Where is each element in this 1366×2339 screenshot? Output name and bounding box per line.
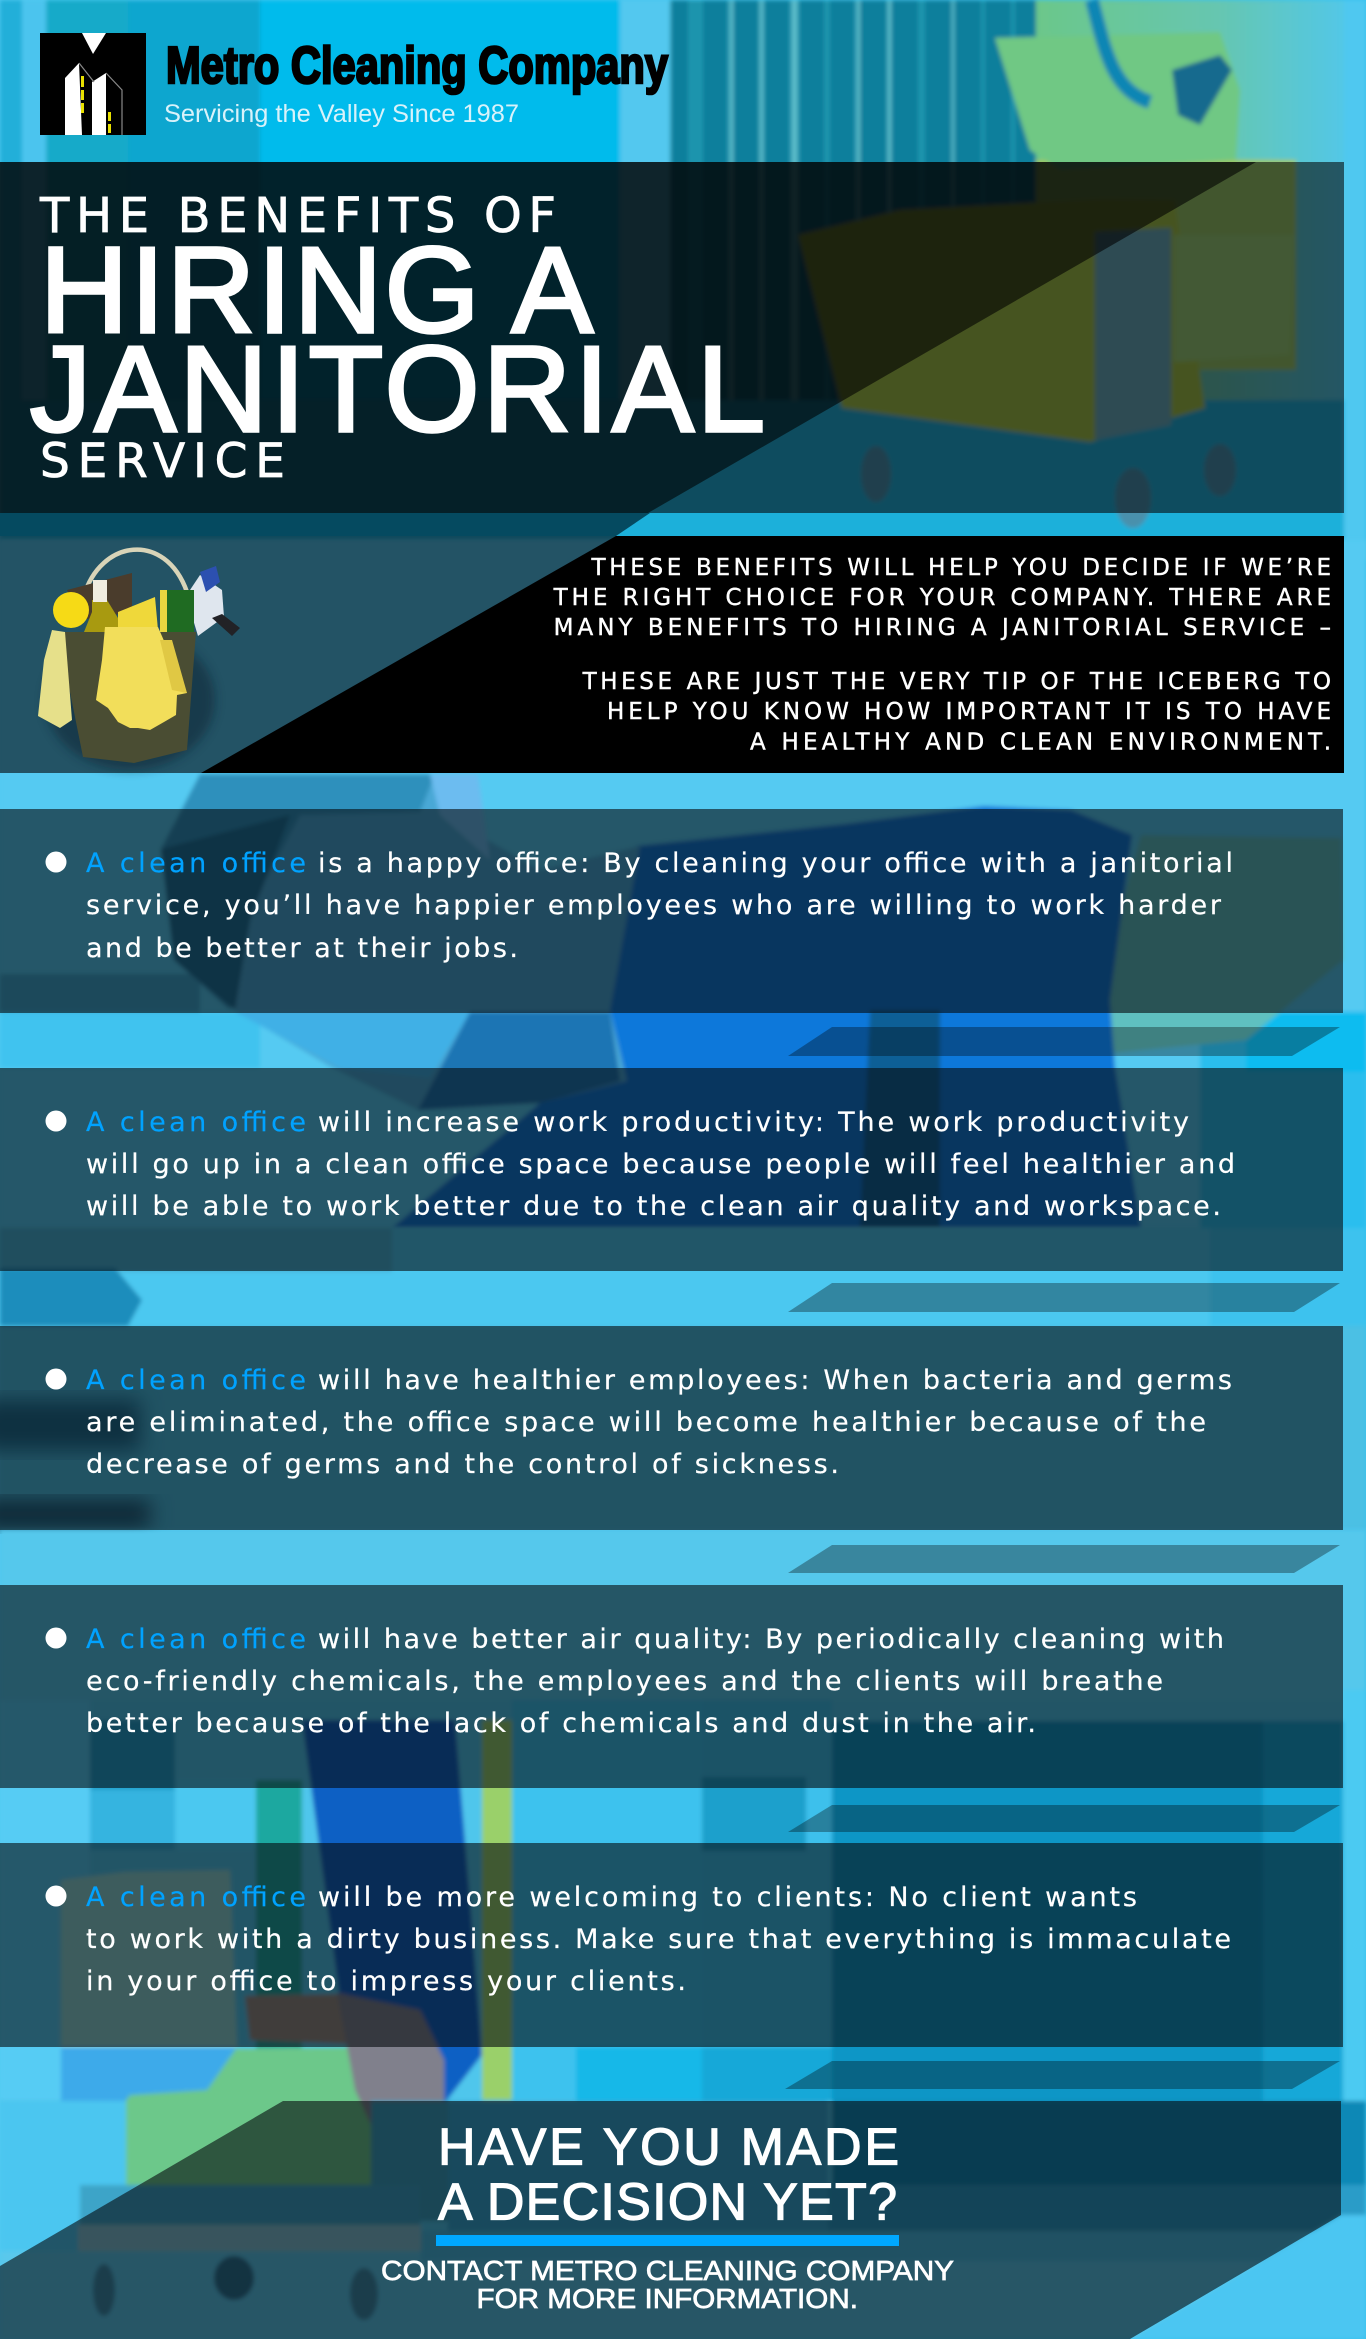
accent bar 1 (788, 1027, 1340, 1056)
icon: cleaning supplies bucket (38, 550, 240, 770)
benefit text: service, you’ll have happier employees who are willing to work harder (86, 890, 1222, 921)
contact text: CONTACT METRO CLEANING COMPANY (381, 2255, 954, 2286)
intro text (553, 555, 1331, 756)
intro text: THE RIGHT CHOICE FOR YOUR COMPANY. THERE ARE (553, 585, 1331, 611)
cart: grey rag, blue rag, bucket, towel, mop (61, 1870, 237, 2047)
panel: benefit 4 (0, 1585, 1343, 1788)
benefit text: and be better at their jobs. (86, 933, 518, 964)
intro text: MANY BENEFITS TO HIRING A JANITORIAL SERVICE – (554, 615, 1331, 641)
benefit text: A clean office (86, 848, 306, 879)
company name: Metro Cleaning Company (166, 37, 668, 95)
benefit text (86, 1882, 1231, 1997)
photo: desk and keyboard (0, 1228, 1366, 1588)
benefit text: A clean office (86, 1624, 306, 1655)
panel: title banner (0, 162, 1344, 513)
benefit text: will have better air quality: By periodically cleaning with (318, 1624, 1224, 1655)
photo: cleaning cart and mop (0, 1530, 1366, 2339)
intro text: HELP YOU KNOW HOW IMPORTANT IT IS TO HAVE (607, 699, 1331, 725)
benefit text (86, 1624, 1224, 1739)
title: JANITORIAL (30, 321, 765, 457)
call to action heading: A DECISION YET? (438, 2174, 897, 2232)
benefit text: will go up in a clean office space because people will feel healthier and (86, 1149, 1235, 1180)
panel: benefit 1 (0, 809, 1343, 1013)
intro text: THESE BENEFITS WILL HELP YOU DECIDE IF WE’RE (590, 555, 1331, 581)
photo: mop bucket scene (0, 0, 1366, 560)
title: HIRING A (40, 222, 594, 358)
title (30, 188, 765, 489)
company tagline: Servicing the Valley Since 1987 (164, 100, 519, 128)
contact text (381, 2255, 954, 2314)
benefit text: in your office to impress your clients. (86, 1966, 686, 1997)
panel: benefit 2 (0, 1068, 1343, 1271)
intro text: THESE ARE JUST THE VERY TIP OF THE ICEBERG TO (582, 669, 1331, 695)
accent bar 3 (788, 1545, 1340, 1573)
black diagonal overlay (0, 162, 1256, 513)
benefit text: decrease of germs and the control of sickness. (86, 1449, 839, 1480)
panel: benefit 5 (0, 1843, 1343, 2047)
panel: introduction (0, 536, 1344, 773)
icon: Metro building logo (40, 33, 146, 135)
title: THE BENEFITS OF (39, 188, 556, 244)
benefit text: eco-friendly chemicals, the employees and the clients will breathe (86, 1666, 1163, 1697)
benefit text: is a happy office: By cleaning your office with a janitorial (318, 848, 1233, 879)
benefit text: A clean office (86, 1882, 306, 1913)
panel: benefit 3 (0, 1326, 1343, 1530)
bullet (46, 1628, 66, 1648)
benefit text: to work with a dirty business. Make sure that everything is immaculate (86, 1924, 1231, 1955)
accent bar 5 (785, 2061, 1340, 2089)
bullet (46, 1110, 66, 1132)
accent bar 4 (788, 1805, 1340, 1832)
benefit text: A clean office (86, 1365, 306, 1396)
blue underline (436, 2235, 899, 2246)
call to action heading: HAVE YOU MADE (438, 2118, 899, 2176)
benefit text: will have healthier employees: When bacteria and germs (318, 1365, 1232, 1396)
accent bar 2 (788, 1283, 1340, 1312)
bullet (46, 1886, 66, 1906)
photo: wringer (798, 199, 1205, 442)
benefit text: will be more welcoming to clients: No client wants (318, 1882, 1137, 1913)
photo: man leaning at desk (0, 540, 1366, 1320)
benefit text (86, 1107, 1235, 1222)
benefit text: will increase work productivity: The work productivity (318, 1107, 1189, 1138)
panel: call to action (0, 2101, 1341, 2339)
benefit text (86, 1365, 1232, 1480)
floor and walls (0, 2101, 126, 2281)
bullet (46, 852, 66, 872)
black diagonal (201, 536, 1344, 773)
logo panel (40, 33, 668, 135)
call to action heading (438, 2118, 899, 2232)
contact text: FOR MORE INFORMATION. (476, 2283, 858, 2314)
benefit text: A clean office (86, 1107, 306, 1138)
benefit text (86, 848, 1233, 964)
benefit text: are eliminated, the office space will become healthier because of the (86, 1407, 1206, 1438)
benefit text: better because of the lack of chemicals and dust in the air. (86, 1708, 1036, 1739)
benefit text: will be able to work better due to the clean air quality and workspace. (86, 1191, 1221, 1222)
intro text: A HEALTHY AND CLEAN ENVIRONMENT. (750, 730, 1331, 756)
title: SERVICE (40, 434, 285, 489)
bullet (46, 1368, 66, 1390)
